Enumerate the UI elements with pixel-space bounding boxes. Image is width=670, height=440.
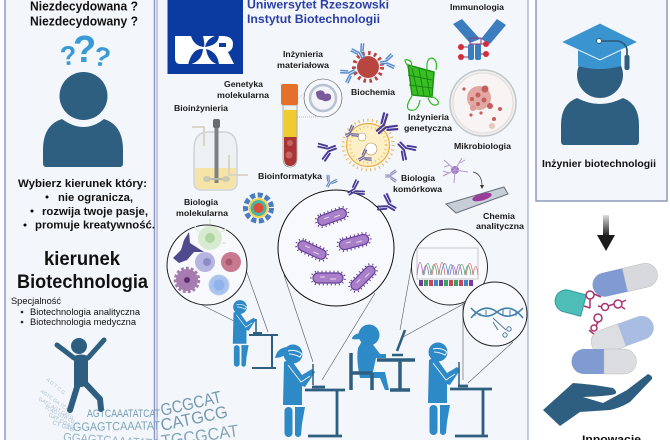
icon: green protein barrel [405, 58, 438, 110]
text block: specialisations: Biotechnologia analityczna [30, 307, 140, 317]
icon: hand [543, 374, 652, 426]
labels: disciplines: materiałowa [277, 60, 329, 70]
labels: disciplines: molekularna [176, 208, 228, 218]
labels: disciplines: komórkowa [393, 184, 442, 194]
icon: virus with antibodies [340, 43, 395, 83]
circle: bacteria [278, 190, 394, 306]
labels: disciplines: Chemia [483, 211, 515, 221]
labels: disciplines: Mikrobiologia [454, 141, 511, 151]
heading: university name [247, 0, 389, 26]
icon: blue spiky particle [246, 195, 272, 221]
icon: capsules [553, 261, 660, 374]
icon: bioreactor [192, 119, 248, 190]
icon: question marks: ? [73, 29, 96, 71]
panel: right [536, 0, 667, 201]
labels: disciplines: Immunologia [450, 2, 504, 12]
heading: programme: kierunek [44, 249, 120, 270]
arrow: down [597, 215, 615, 251]
circle: cells [167, 219, 247, 305]
icon: question marks [59, 29, 113, 73]
icon: petri dish [450, 70, 516, 136]
labels: disciplines: Bioinformatyka [258, 171, 322, 181]
icon: jumping person [57, 338, 104, 410]
DNA letters: GGAGTCAAATAT [73, 418, 161, 434]
labels: disciplines: Genetyka [224, 79, 263, 89]
text block: specialisations: Biotechnologia medyczna [30, 317, 136, 327]
circle: chromatogram [412, 229, 488, 305]
DNA letters: TCAG GTA CG [43, 404, 76, 426]
icon: immunology antibody [453, 19, 506, 60]
labels: disciplines: Biologia [184, 197, 218, 207]
DNA letters: GATC AGT CATG [37, 397, 75, 422]
labels: disciplines: Bioinżynieria [174, 103, 228, 113]
heading: university name: Instytut Biotechnologii [247, 12, 380, 26]
circle: DNA scissors [463, 282, 527, 346]
DNA letters: GCGCAT [159, 387, 223, 420]
capsule teal [553, 287, 586, 316]
text block: choose: Wybierz kierunek który: [18, 178, 147, 190]
DNA letters: CATGCG [159, 402, 229, 435]
text block: specialisations: Specjalność [11, 296, 62, 306]
icon: central cell with antibodies [317, 112, 417, 189]
molecule [584, 291, 626, 335]
heading: undecided [30, 0, 138, 28]
capsule front [572, 349, 636, 374]
labels: disciplines: Inżynieria [283, 49, 323, 59]
heading: programme: Biotechnologia [17, 272, 148, 293]
labels: disciplines: Biochemia [351, 87, 395, 97]
DNA letters: AGTC GA TCA [39, 389, 70, 413]
DNA letters: GAT CGAG [47, 412, 75, 431]
labels: disciplines: molekularna [217, 90, 269, 100]
capsule lower [588, 312, 657, 357]
heading: programme [17, 249, 148, 293]
text block: choose [18, 178, 155, 232]
labels: disciplines: Biologia [401, 173, 435, 183]
person: large left scientist [275, 344, 345, 437]
labels: disciplines [174, 2, 524, 231]
heading: undecided: Niezdecydowany ? [30, 14, 138, 28]
labels: disciplines: Inżynieria [408, 112, 449, 122]
DNA letters: CT GAG [51, 420, 75, 434]
DNA letters [37, 377, 240, 440]
DNA letters: A G T C G [45, 377, 66, 396]
icon: question marks: ? [59, 40, 78, 72]
text: graduate label: Inżynier biotechnologii [542, 158, 656, 170]
logo: university [168, 0, 243, 74]
callout lines [200, 263, 513, 383]
panel: left [5, 0, 155, 440]
antibodies over circle [345, 179, 399, 217]
labels: disciplines: analityczna [476, 221, 524, 231]
icon: neuron and slide [443, 158, 508, 213]
panel: centre [157, 0, 528, 440]
labels: disciplines: genetyczna [404, 123, 452, 133]
icon: person [43, 72, 123, 167]
icon: graduate [561, 23, 639, 145]
icon: blood tube [281, 79, 342, 167]
icon: question marks: ? [91, 41, 113, 73]
person: small scientist [233, 300, 278, 368]
text block: choose: promuje kreatywność. [35, 220, 155, 232]
text block: choose: rozwija twoje pasje, [42, 206, 148, 218]
text block: choose: nie ogranicza, [58, 192, 133, 204]
person: large right scientist [428, 342, 492, 436]
person: seated at computer [351, 324, 415, 390]
capsule upper [590, 261, 660, 299]
text block: specialisations [11, 296, 140, 327]
DNA letters: AGTCAAATATCAT [87, 408, 160, 420]
